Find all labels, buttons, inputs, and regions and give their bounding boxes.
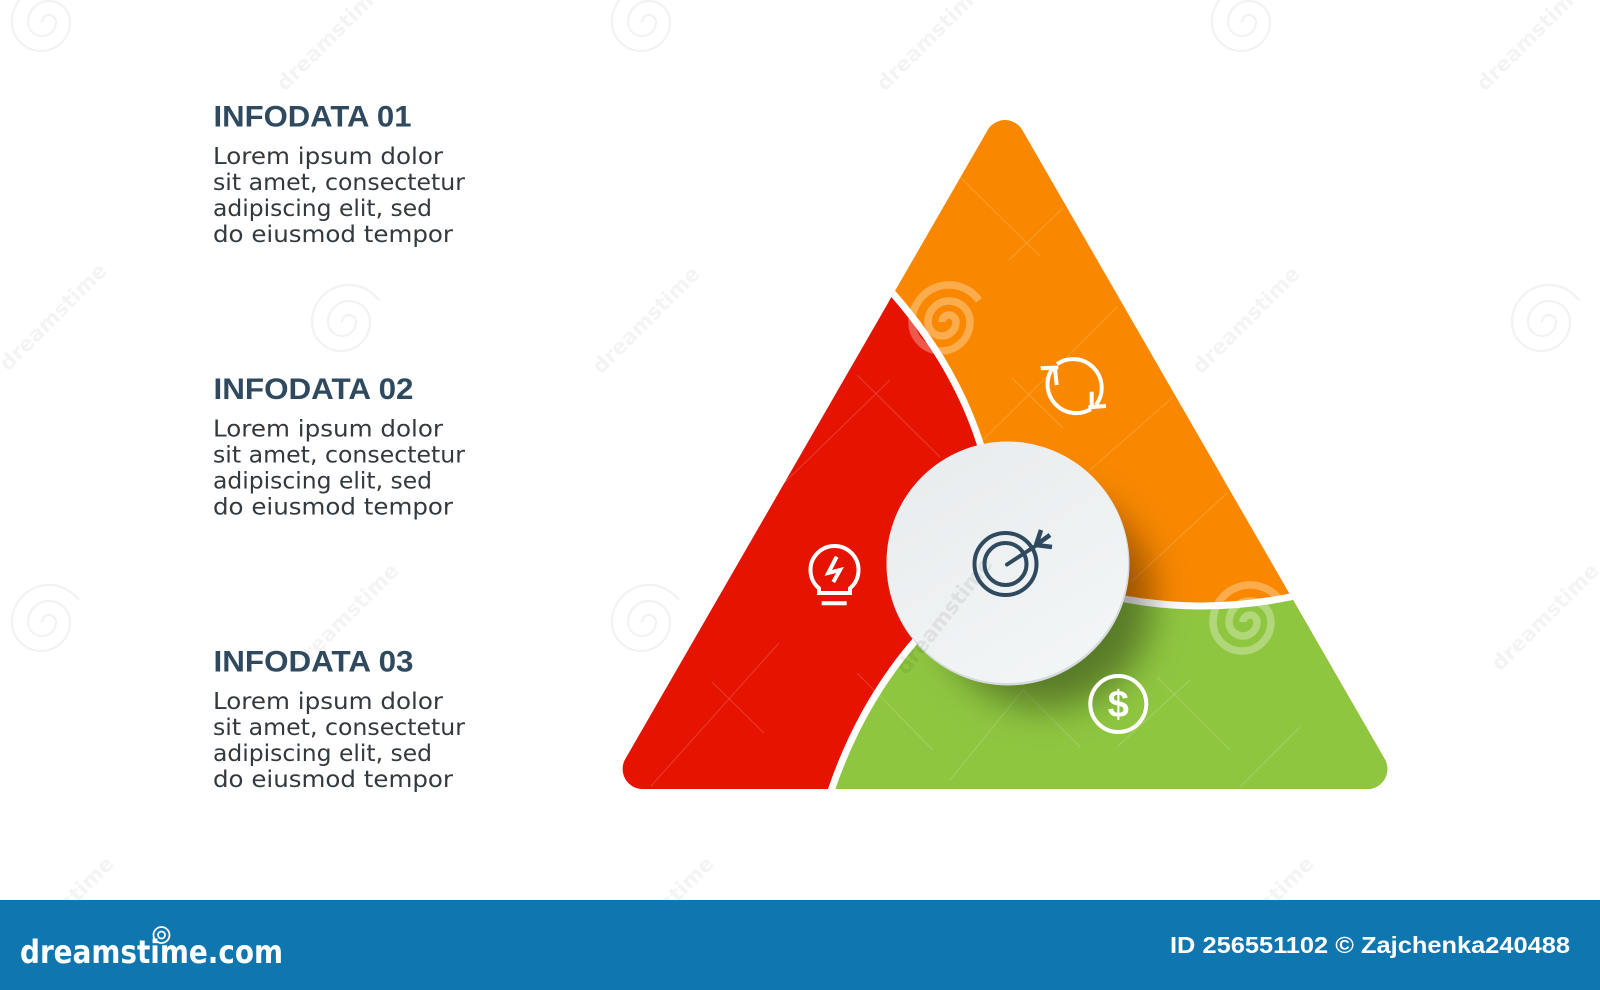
icon: refresh arrows: [1041, 359, 1106, 413]
body 03: adipiscing elit, sed: [213, 741, 432, 767]
icon: dollar: $: [1108, 684, 1129, 726]
watermark pattern: dreamstime: [602, 852, 719, 969]
footer bar: [0, 900, 1600, 990]
separators: [828, 288, 1295, 800]
text block: infodata 03: [213, 646, 466, 793]
text block: infodata 02: [213, 373, 466, 520]
icon: target: [974, 530, 1052, 595]
image id and credit: ID 256551102 © Zajchenka240488: [1170, 932, 1570, 958]
heading 01: INFODATA 01: [214, 100, 412, 134]
body 02: Lorem ipsum dolor: [213, 416, 444, 442]
body 02: sit amet, consectetur: [213, 442, 466, 468]
body 01: do eiusmod tempor: [213, 222, 454, 248]
center disc: [886, 442, 1130, 686]
text block: infodata 01: [213, 100, 466, 248]
icon: light bulb: [811, 546, 859, 603]
body 02: do eiusmod tempor: [213, 494, 454, 520]
segment: orange: [887, 120, 1388, 789]
logo text: dreamstime.com: [20, 933, 283, 971]
body 01: Lorem ipsum dolor: [213, 144, 444, 170]
triangle diagram: [622, 120, 1388, 789]
body 02: [213, 416, 466, 520]
body 03: Lorem ipsum dolor: [213, 689, 444, 715]
segment: green: [835, 596, 1388, 789]
watermark on triangle: [651, 178, 1300, 787]
body 01: sit amet, consectetur: [213, 170, 466, 196]
body 03: do eiusmod tempor: [213, 767, 454, 793]
icon: dollar: [1090, 676, 1146, 732]
watermark pattern: dreamstime: [2, 852, 119, 969]
watermark pattern: dreamstime: [1188, 262, 1305, 379]
body 03: [213, 689, 466, 793]
heading 03: INFODATA 03: [214, 646, 414, 678]
watermark pattern: dreamstime: [287, 559, 404, 676]
watermark pattern: dreamstime: [588, 262, 705, 379]
body 02: adipiscing elit, sed: [213, 468, 432, 494]
icon: logo spiral: [154, 927, 170, 943]
disc shadow: [937, 492, 1153, 708]
segment: red: [622, 294, 977, 789]
heading 02: INFODATA 02: [214, 373, 414, 406]
watermark pattern: dreamstime: [1202, 852, 1319, 969]
body 03: sit amet, consectetur: [213, 715, 466, 741]
body 01: adipiscing elit, sed: [213, 196, 432, 222]
body 01: [213, 144, 466, 248]
center disc: dreamstime: [891, 553, 998, 679]
